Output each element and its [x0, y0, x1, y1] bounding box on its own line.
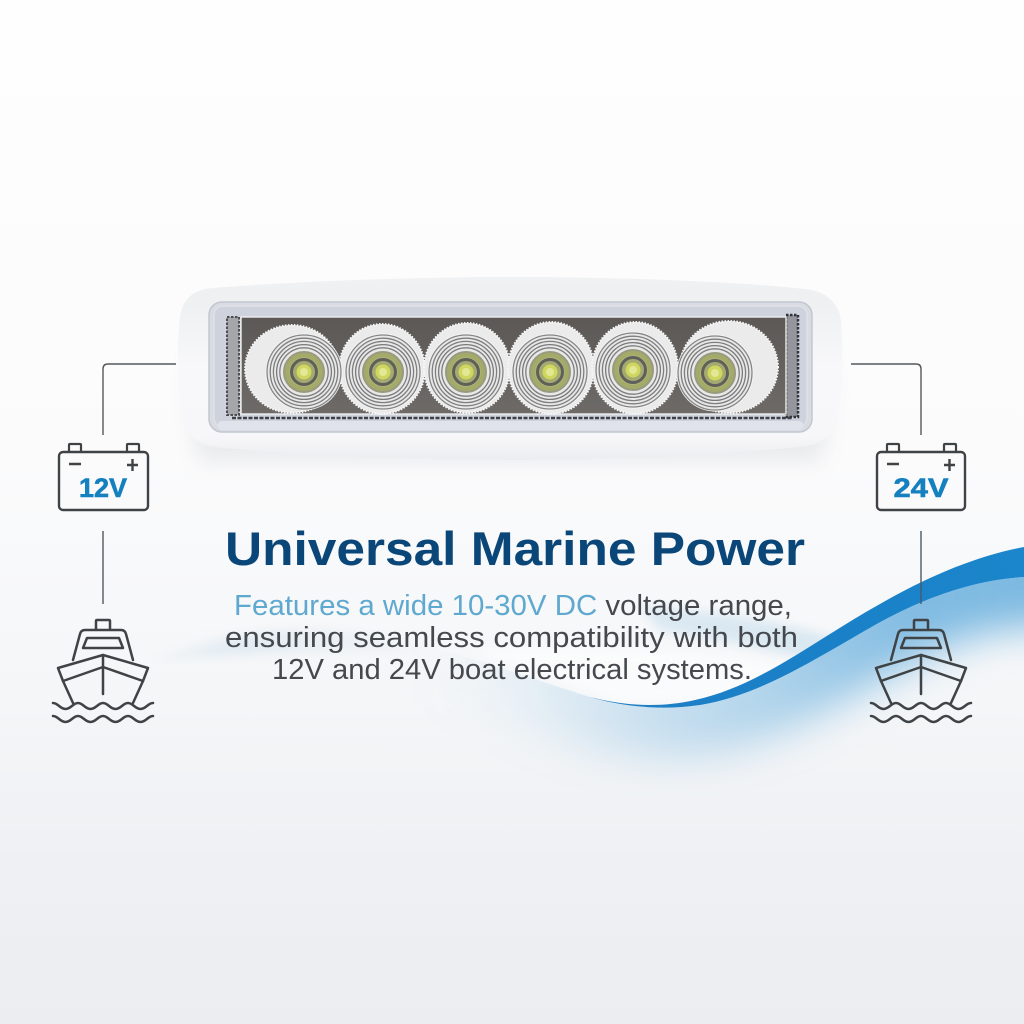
light bar shadow [190, 330, 830, 462]
LED 1 [266, 334, 342, 410]
LED 5 [595, 332, 671, 408]
title: Universal Marine Power [225, 522, 805, 575]
dark reflector panel [241, 317, 786, 414]
bottom rail [232, 417, 792, 419]
description text: ensuring seamless compatibility with both [225, 622, 798, 654]
right heat fins [786, 315, 798, 417]
LED 4 [512, 334, 588, 410]
connector: 24V battery to right boat [920, 531, 922, 604]
lens bodies [245, 321, 778, 414]
light bar lens frame [209, 302, 812, 432]
left heat fins [227, 317, 239, 415]
faint background wave [150, 606, 846, 703]
connector: 12V battery to left boat [102, 531, 104, 604]
LED 6 [677, 335, 753, 411]
connector: left light to 12V battery [103, 364, 176, 435]
wave: blue band [590, 547, 1024, 708]
icon: 12V battery [59, 444, 148, 510]
icon: right boat [871, 620, 971, 722]
LED 2 [345, 334, 421, 410]
icon: left boat [53, 620, 153, 722]
icon: 12V battery: 12V [79, 473, 127, 503]
description text: 12V and 24V boat electrical systems. [272, 654, 752, 686]
icon: 24V battery [877, 444, 965, 510]
lower frame band [218, 421, 803, 430]
wave: light blue glow [430, 570, 1024, 708]
icon: 24V battery: 24V [894, 473, 948, 503]
description text: Features a wide 10-30V DC voltage range, [234, 590, 792, 622]
description text [225, 590, 798, 686]
connector: right light to 24V battery [851, 364, 921, 435]
light bar housing [178, 277, 842, 460]
LED light bar [178, 277, 842, 462]
LED 3 [428, 334, 504, 410]
